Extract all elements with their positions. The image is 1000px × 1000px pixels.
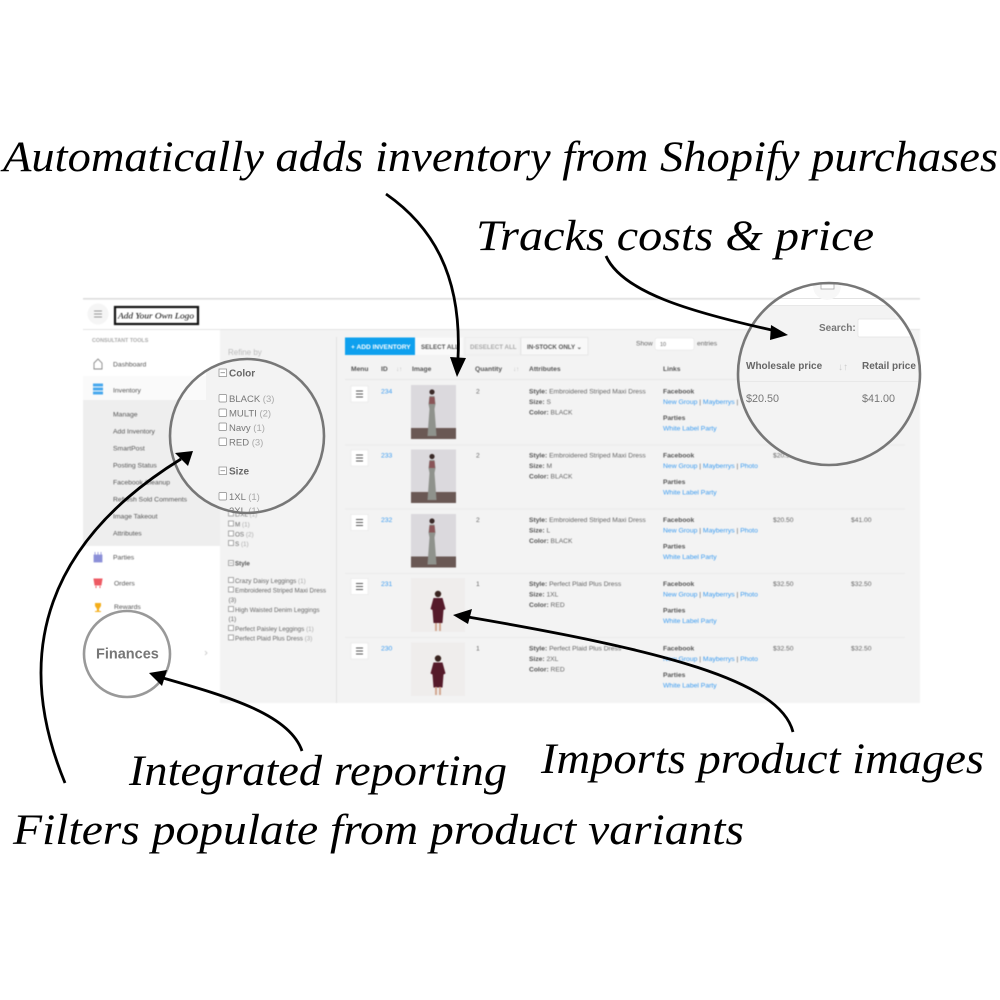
show entries control: Show [636,340,653,348]
table header: Image [412,366,432,373]
magnifier: prices [735,272,928,465]
row 232: 232 [381,517,393,524]
arrow: product images [453,609,793,732]
row 231: Facebook [663,581,694,588]
toolbar buttons: DESELECT ALL [470,344,517,351]
row 231: 231 [381,581,393,588]
row 233: 2 [476,452,480,460]
row 231: White Label Party [663,618,717,625]
sidebar: Dashboard [113,362,146,368]
sidebar: Attributes [113,530,142,538]
magnifier: prices: Search: [819,323,856,334]
magnifier: filters: 1XL (1) [229,492,260,503]
refine filters: Style [235,560,250,568]
row 234: Size: S [529,399,551,406]
logo: Add Your Own Logo [117,310,194,320]
magnifier: prices: $41.00 [862,393,895,405]
row 232: $20.50 [773,517,794,524]
row 231: New Group | Mayberrys | Photo [663,592,758,598]
sidebar: CONSULTANT TOOLS [92,338,149,344]
magnifier: filters: BLACK (3) [229,394,274,405]
caption: filters populate: Filters populate from product variants [12,807,744,854]
sidebar: SmartPost [113,446,145,452]
row 230: Style: Perfect Plaid Plus Dress [529,646,622,652]
caption: automatically adds inventory: Automatically adds inventory from Shopify purchases [0,134,998,181]
refine filters: S (1) [235,541,249,548]
row 232: 2 [476,517,480,524]
toolbar buttons: + ADD INVENTORY [351,344,411,351]
refine filters: OS (2) [235,532,254,538]
row 230: $32.50 [773,646,794,652]
sidebar: Parties [113,554,135,562]
show entries control [636,338,718,350]
refine filters: Perfect Paisley Leggings (1) [235,626,314,633]
caption: tracks costs: Tracks costs & price [476,213,874,260]
row 230 [351,642,872,696]
row 233: New Group | Mayberrys | Photo [663,463,758,470]
row 234 [351,385,739,439]
logo [115,307,198,324]
row 230: Color: RED [529,666,565,674]
row 231: Style: Perfect Plaid Plus Dress [529,581,622,588]
row 234: New Group | Mayberrys | [663,399,739,406]
refine filters [228,348,326,642]
app screenshot [83,298,920,703]
magnifier: prices: $20.50 [746,393,779,405]
row 232: Parties [663,544,686,550]
magnifier: finances [84,611,170,697]
row 233: $20.50 [773,452,794,460]
sidebar [83,330,220,703]
row 230: Parties [663,672,686,679]
toolbar buttons [345,338,588,355]
arrow: costs to wholesale price [606,256,788,340]
arrow: finances [149,670,302,751]
toolbar buttons: SELECT ALL [421,344,459,351]
refine filters: High Waisted Denim Leggings [235,607,319,614]
row 232: Size: L [529,528,550,534]
row 233: White Label Party [663,490,717,496]
magnifier: finances: Finances [96,646,159,662]
row 234: White Label Party [663,426,717,432]
sidebar: Manage [113,412,138,418]
row 230: New Group | Mayberrys | Photo [663,656,758,663]
row 233: Style: Embroidered Striped Maxi Dress [529,452,646,460]
row 233: Color: BLACK [529,474,573,480]
row 232: White Label Party [663,554,717,561]
content background [83,298,920,703]
table header: Menu [351,366,368,373]
sidebar: Facebook Cleanup [113,480,170,486]
refine filters: L/XL (1) [235,512,257,518]
table header: Quantity [475,366,502,373]
row 234: Parties [663,415,686,422]
magnifier: filters: MULTI (2) [229,408,271,420]
magnifier: filters: Navy (1) [229,423,265,434]
row 232: Style: Embroidered Striped Maxi Dress [529,517,646,524]
row 232: Color: BLACK [529,538,573,545]
row 234: Style: Embroidered Striped Maxi Dress [529,388,646,396]
row 230: $32.50 [851,646,872,652]
main column divider [336,337,337,703]
row 233: Parties [663,479,686,486]
show entries control: 10 [660,342,666,348]
magnifier: prices: Retail price [862,361,916,372]
row 231: $32.50 [851,581,872,588]
row 231 [351,578,872,632]
row 233: 233 [381,452,393,460]
row 232 [351,514,872,568]
table header: ↓↑ [513,367,519,373]
caption: imports product images: Imports product images [540,736,984,783]
arrow: inventory to image [386,194,466,377]
sidebar: Orders [114,580,135,588]
row 230: Size: 2XL [529,656,559,663]
sidebar: Add Inventory [113,428,156,436]
magnifier: filters: Size [229,466,249,478]
top bar [83,298,920,330]
magnifier: prices: Wholesale price [746,361,823,372]
row 230: White Label Party [663,682,717,690]
table header: Attributes [529,366,561,373]
row 232: New Group | Mayberrys | Photo [663,528,758,534]
row 234: 2 [476,388,480,396]
sidebar: Refresh Sold Comments [113,496,188,504]
row 233 [351,450,794,503]
sidebar: Posting Status [113,462,157,470]
row 231: Color: RED [529,602,565,609]
row 231: Size: 1XL [529,592,559,598]
row 232: $41.00 [851,517,872,524]
arrow: filters [41,451,193,783]
row 232: Facebook [663,517,694,524]
refine filters: (1) [228,616,236,623]
row 230: 230 [381,646,393,652]
refine filters: M (1) [235,522,250,528]
refine filters: Perfect Plaid Plus Dress (3) [235,636,312,642]
table header: ↓↑ [396,367,402,373]
caption: integrated reporting: Integrated reporting [128,748,507,795]
magnifier: filters: RED (3) [229,438,263,448]
magnifier: prices: ↓↑ [838,362,848,373]
refine filters: Refine by [228,348,262,357]
row 230: Facebook [663,646,694,652]
row 231: Parties [663,608,686,614]
row 231: 1 [476,581,480,588]
table header [345,366,905,638]
magnifier: filters [170,358,324,517]
magnifier: filters: Color [229,368,255,380]
magnifier: filters: 2XL (1) [229,506,260,517]
row 231: $32.50 [773,581,794,588]
table header: ID [381,366,388,373]
row 233: Facebook [663,452,694,460]
toolbar buttons: IN-STOCK ONLY ⌄ [527,344,582,351]
table header: Links [663,366,681,373]
sidebar: Inventory [113,388,142,394]
sidebar: Rewards [114,604,141,611]
show entries control: entries [697,340,718,348]
sidebar: Image Takeout [113,514,158,520]
refine filters: (3) [228,597,236,604]
row 230: 1 [476,646,480,652]
row 234: Facebook [663,388,694,396]
refine filters: Embroidered Striped Maxi Dress [235,588,326,594]
row 234: Color: BLACK [529,410,573,416]
row 233: Size: M [529,463,552,470]
row 234: 234 [381,388,393,396]
refine filters: Crazy Daisy Leggings (1) [235,578,306,585]
